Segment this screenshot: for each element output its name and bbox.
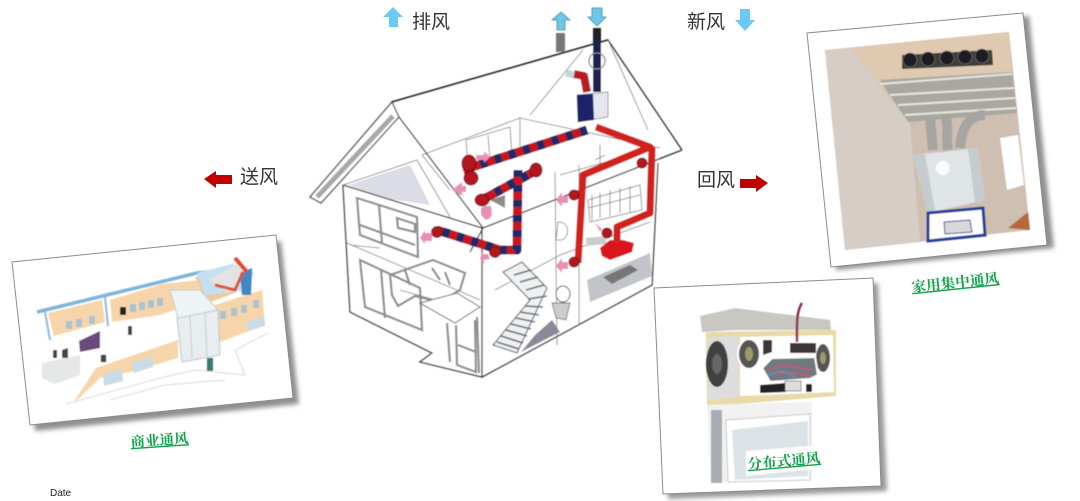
- arrow and label: supply air: 送风: [240, 166, 278, 188]
- power cable: [797, 303, 806, 416]
- interior band: [42, 315, 160, 372]
- concrete top: [700, 308, 831, 332]
- caption: distributed ventilation: 分布式通风: [747, 450, 821, 473]
- ventilator body: [706, 330, 836, 405]
- building windows: [66, 298, 265, 386]
- heat recovery unit: [577, 92, 608, 122]
- photo card: home central ventilation: [807, 13, 1054, 270]
- duct: return, red: [578, 127, 652, 263]
- photo card: commercial ventilation: [12, 235, 299, 431]
- duct terminals: [432, 155, 647, 267]
- side fan: [706, 341, 728, 387]
- arrow and label: exhaust air: 排风: [412, 11, 450, 33]
- arrow and label: supply air: [204, 166, 278, 188]
- date footer: Date: [50, 488, 72, 499]
- illustration: cutaway house with ventilation ducts: [310, 8, 682, 377]
- arrow and label: fresh air: 新风: [687, 11, 725, 33]
- atrium: [177, 310, 220, 362]
- caption: home central ventilation: 家用集中通风: [911, 270, 1000, 296]
- kitchen floor unit: [600, 240, 634, 260]
- duct: mixed red and navy: [437, 130, 587, 250]
- bathroom and kitchen: [490, 145, 652, 320]
- arrow and label: fresh air: [687, 9, 755, 33]
- duct up to roof: [593, 30, 601, 92]
- roof vent arrows: [552, 8, 606, 30]
- small pink airflow arrows: [420, 151, 602, 273]
- window below: [707, 402, 812, 483]
- staircase: [493, 262, 560, 353]
- counter and shelving: [420, 293, 480, 373]
- lower-floor window and sofa: [350, 245, 470, 330]
- arrow and label: return air: 回风: [697, 170, 735, 191]
- arrow and label: return air: [697, 170, 768, 192]
- building walls: [48, 280, 205, 336]
- arrow and label: exhaust air: [383, 7, 450, 33]
- roof: [37, 270, 230, 312]
- upper-floor windows: [357, 127, 512, 257]
- roof plant: [208, 262, 248, 293]
- house walls and roof: [310, 40, 682, 377]
- ducts: exhaust and supply: [437, 28, 652, 263]
- photo card: distributed ventilation: [654, 278, 887, 499]
- caption: commercial ventilation: 商业通风: [130, 431, 189, 451]
- ground lines: [66, 333, 268, 404]
